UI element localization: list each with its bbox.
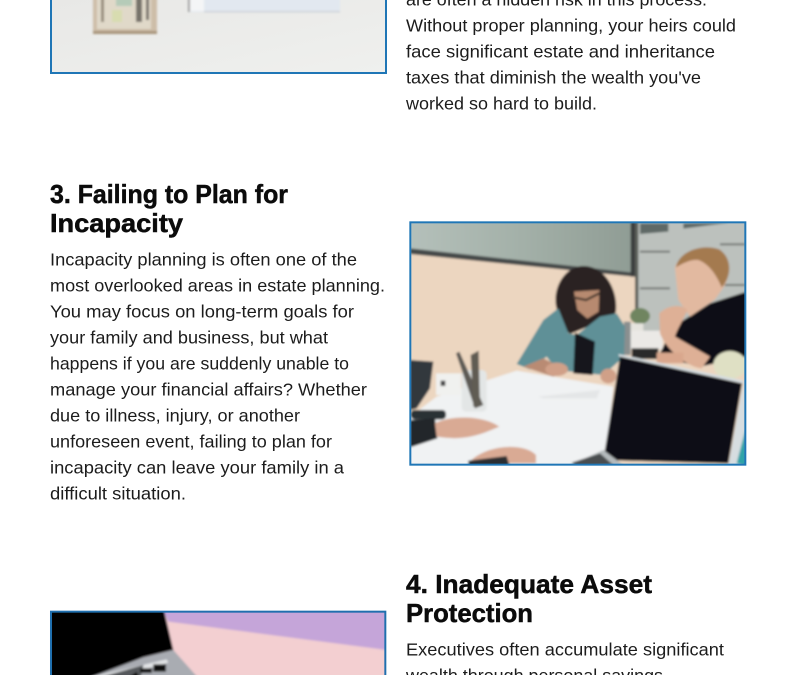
text block: section 3 body: your family and business, but what [50,328,328,348]
text block: section 2 tail: worked so hard to build. [405,94,597,114]
text block: section 3 body: manage your financial affairs? Whether [50,380,367,400]
table [410,371,613,467]
heading: section 3: Incapacity [50,208,184,238]
white paper [206,0,339,10]
woman [556,266,616,334]
text block: section 4 body: Executives often accumulate significant [406,640,724,660]
hands [410,418,437,447]
text block: section 2 tail [405,0,736,114]
heading: section 3: 3. Failing to Plan for [50,179,288,209]
text block: section 2 tail: taxes that diminish the wealth you've [406,68,701,88]
text block: section 3 body: due to illness, injury, or another [50,406,300,426]
cash stack [93,0,157,34]
heading: section 4: 4. Inadequate Asset [406,569,652,599]
plant and side table [630,308,650,324]
text block: section 3 body: Incapacity planning is often one of the [50,250,357,270]
text block: section 3 body: You may focus on long-term goals for [50,302,354,322]
photo: money and paper on white desk [50,0,387,74]
text block: section 2 tail: face significant estate and inheritance [406,42,715,62]
photo: laptop on pink and purple background [50,610,387,675]
wall and windows [411,252,744,464]
phone [410,360,433,410]
text block: section 3 body: happens if you are suddenly unable to [50,354,349,374]
text block: section 3 body: difficult situation. [50,484,186,504]
text block: section 3 body: most overlooked areas in estate planning. [50,276,385,296]
heading: section 4: Protection [406,598,533,628]
text block: section 3 body: incapacity can leave your family in a [50,458,344,478]
man [660,292,747,367]
text block: section 2 tail: Without proper planning, your heirs could [406,16,736,36]
text block: section 3 body [50,250,385,504]
text block: section 4 body [405,640,724,675]
text block: section 3 body: unforeseen event, failing to plan for [50,432,332,452]
laptop [618,354,747,467]
photo: meeting around a table [410,222,747,467]
heading: section 3 [50,179,288,238]
heading: section 4 [406,569,652,628]
pencil glass [462,370,487,412]
